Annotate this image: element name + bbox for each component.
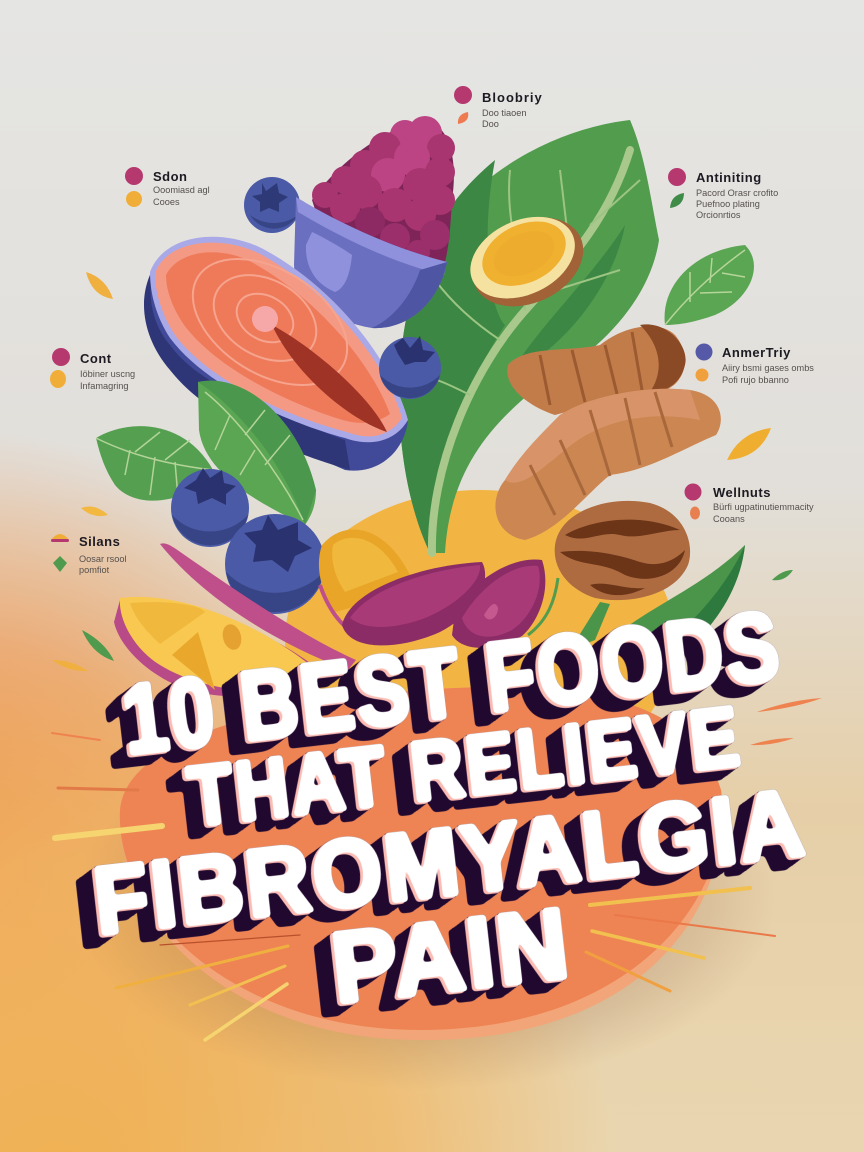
- confetti and speed lines: [52, 272, 822, 1040]
- label: AnmerTriy: [696, 344, 814, 385]
- label: Wellnuts: Cooans: [713, 514, 745, 524]
- label: Wellnuts: [684, 484, 814, 524]
- food: walnut: [555, 501, 690, 600]
- label: Silans: [51, 534, 126, 575]
- label: Silans: Silans: [79, 534, 120, 549]
- label: AnmerTriy: Aiiry bsmi gases ombs: [722, 363, 814, 373]
- food: lemon behind: [319, 529, 410, 612]
- food: raspberries in blue bowl: [294, 116, 455, 328]
- label: Wellnuts: Wellnuts: [713, 485, 771, 500]
- food: left leaves: [96, 381, 316, 525]
- label: Cont: [50, 348, 135, 391]
- title line 3: FIBROMYALGIA: [88, 769, 812, 955]
- label: Bloobriy: Bloobriy: [482, 90, 543, 105]
- title: [88, 590, 812, 1025]
- food: magenta strip: [160, 543, 356, 670]
- food: turmeric roots: [495, 324, 721, 540]
- label: Sdon: Cooes: [153, 197, 180, 207]
- food: right green leaf: [570, 545, 745, 652]
- title line 2: THAT RELIEVE: [184, 688, 747, 844]
- plate shadow: [75, 710, 775, 1090]
- label: Sdon: Ooomiasd agl: [153, 185, 210, 195]
- label: Cont: Infamagring: [80, 381, 129, 391]
- label: Cont: Iöbiner uscng: [80, 369, 135, 379]
- label: Bloobriy: Doo: [482, 119, 499, 129]
- food: lemon slice: [114, 597, 330, 696]
- label: Wellnuts: Bürfi ugpatinutiemmacity: [713, 502, 814, 512]
- food: salmon steak: [144, 233, 408, 471]
- label: Sdon: [125, 167, 210, 207]
- food: blueberry top: [244, 177, 300, 233]
- food: blueberries lower left: [171, 468, 325, 614]
- label: Bloobriy: [454, 86, 543, 129]
- label: Antiniting: Antiniting: [696, 170, 762, 185]
- label: Cont: Cont: [80, 351, 112, 366]
- label: Antiniting: Pacord Orasr crofito: [696, 188, 778, 198]
- label: Silans: pomfiot: [79, 565, 110, 575]
- label: AnmerTriy: AnmerTriy: [722, 345, 791, 360]
- food: beets: [342, 559, 558, 648]
- food: halved fruit: [457, 198, 598, 323]
- label: Antiniting: Puefnoo plating: [696, 199, 760, 209]
- label: Antiniting: [668, 168, 778, 220]
- food: blueberry right of salmon: [379, 336, 441, 399]
- yellow backdrop circle: [285, 490, 675, 790]
- label: Bloobriy: Doo tiaoen: [482, 108, 526, 118]
- label: AnmerTriy: Pofi rujo bbanno: [722, 375, 789, 385]
- title line 4: PAIN: [326, 887, 577, 1025]
- label: Antiniting: Orcionrtios: [696, 210, 741, 220]
- label: Sdon: Sdon: [153, 169, 188, 184]
- food: small right leaf: [665, 245, 754, 325]
- orange bowl: [120, 687, 722, 1040]
- label: Silans: Oosar rsool: [79, 554, 126, 564]
- food: large spinach leaf: [399, 120, 659, 553]
